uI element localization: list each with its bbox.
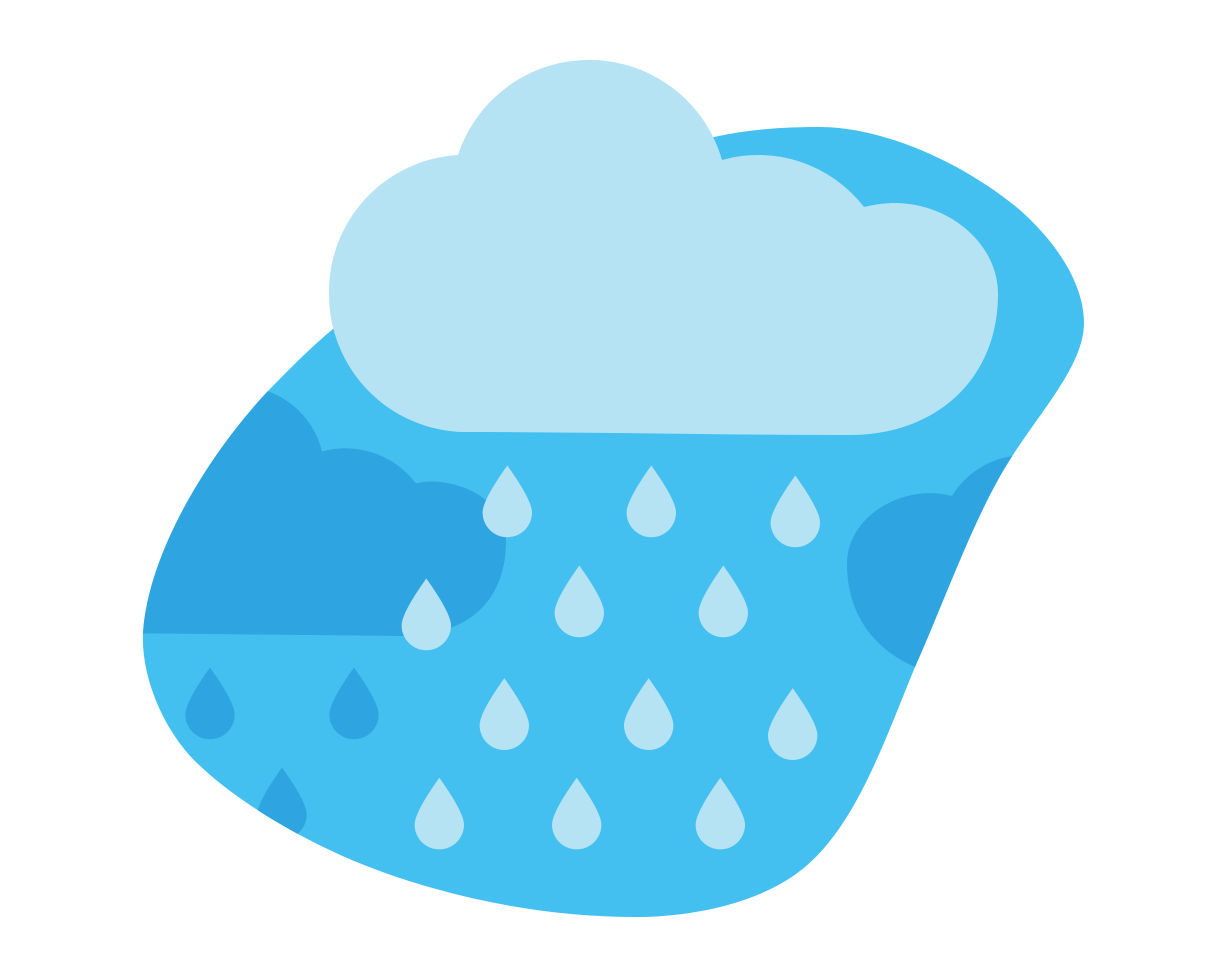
background raindrops [185, 668, 379, 839]
foreground raindrops [402, 466, 820, 849]
background cloud left [143, 391, 506, 636]
background cloud right [847, 456, 1012, 667]
illustration: rain cloud on blob [142, 60, 1084, 917]
main cloud [329, 60, 998, 435]
blob background [143, 127, 1084, 917]
